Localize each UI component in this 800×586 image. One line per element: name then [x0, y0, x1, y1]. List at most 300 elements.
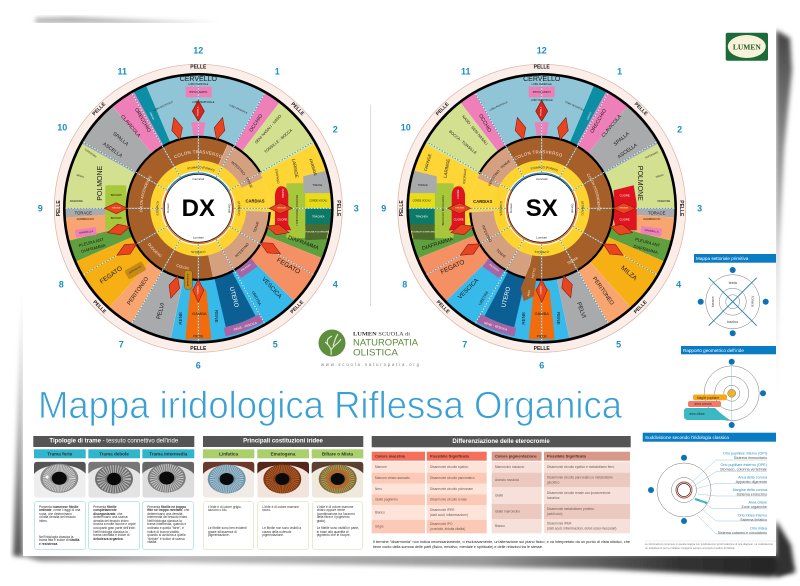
organ labels: PERITONEO — [126, 276, 151, 306]
clock numbers: 11 — [461, 66, 470, 76]
organ labels — [70, 76, 330, 338]
colon and stomach labels: INTESTINO — [232, 161, 246, 175]
column headers — [34, 449, 194, 458]
organ labels: ORECCHIO — [589, 108, 608, 134]
legend labels: Orlo pupillare interno (OPI) — [723, 452, 767, 456]
outer skin ring: PELLE — [534, 65, 550, 71]
legend labels: Orlo iridea — [750, 526, 768, 530]
outer skin ring: PELLE — [435, 299, 451, 316]
reflex diamonds: TIROIDE — [112, 207, 121, 209]
clock numbers: 3 — [354, 203, 359, 213]
organ labels: BRONCHI — [111, 194, 122, 197]
table: colore pigmentazione: Arancio rossiccio — [495, 478, 519, 482]
organ labels: FARINGE — [423, 153, 432, 171]
organ labels: OCCHIO — [248, 113, 264, 133]
clock numbers: 6 — [196, 360, 201, 370]
clock numbers: 6 — [539, 360, 544, 370]
outer skin ring: PELLE — [633, 101, 649, 118]
organ labels: RENE - VESCICA — [233, 321, 257, 332]
organ labels: SUPERIORE — [84, 148, 97, 159]
organ labels: IPPOCAMPO — [533, 90, 551, 94]
note: tiene conto della somma delle parti (fisico, emotivo, mentale e spirituale) e delle relazioni tra le stesse. — [373, 545, 543, 549]
organ labels: POLMONE — [636, 166, 643, 201]
table: colore pigmentazione: Bianco — [495, 524, 505, 528]
organ labels: CORDE VOCALI — [413, 199, 431, 202]
organ labels: BRONCHI / BRONCHIOLI — [295, 195, 299, 226]
disclaimer — [645, 541, 776, 550]
table: colore macchia: Disarmonie circuito pancreatico — [430, 476, 475, 480]
table: colore macchia — [372, 452, 487, 533]
column headers — [203, 449, 363, 458]
reflex diamonds: TIROIDE — [455, 207, 465, 209]
diagram: area corona — [694, 402, 712, 406]
title: Mappa iridologica Riflessa Organica — [38, 385, 623, 427]
dashed hour spokes — [409, 75, 675, 341]
outer skin ring: PELLE — [289, 299, 306, 315]
organ labels: PELVI — [575, 301, 586, 319]
disclaimer: Le informazioni contenute in questa mappa non sostituiscono la formulazione di una diagnosi, né costituiscono — [645, 543, 774, 546]
text box: trama debole: Presenta fibrille completamente disorganizzate, che determinano una scarsa densità del tessuto irideo dovuta a molte lacune e cripte occupanti gran parte dell'iride. Nell'iridologia classica la trama rarefatta è indice di debolezza organica. — [93, 504, 136, 541]
legend labels: Orlo iridea interno — [738, 514, 767, 518]
disclaimer: un trattamento per le malattie: rivolgersi sempre al proprio medico di fiducia. — [645, 547, 735, 550]
organ labels: TONSILLE - BOCCA — [264, 128, 293, 154]
organ labels: CUORE — [456, 189, 460, 199]
table: colore pigmentazione: (acidi urici) — [547, 512, 562, 516]
table: colore macchia: Marrone — [375, 465, 387, 469]
legend labels: Margine della corona — [733, 488, 768, 492]
text box: biliare o mista: L'iride è di colore marrone chiaro oppure verde (combinazione tra l'azzurro della fibra e il pigmento giallo). — [317, 504, 355, 523]
organ labels: CORDE VOCALI — [309, 199, 328, 202]
organ labels: BOCCA - TONSILLE — [448, 130, 478, 155]
table: colore pigmentazione: Disarmonie circuito epatico e metabolismo ferro — [547, 465, 615, 469]
clock numbers: 3 — [697, 203, 702, 213]
organ labels: PROSTATA — [241, 263, 252, 272]
organ labels: VESCICA — [457, 278, 480, 301]
logo: Lumen scuola di naturopatia olistica — [318, 330, 420, 367]
organ labels: ASCELLA — [617, 142, 639, 160]
diagram — [684, 359, 766, 428]
vertebral labels and SX: Dorsali — [509, 203, 513, 213]
reflex diamonds: PINEALE — [540, 106, 543, 116]
heading: Principali costituzioni iridee — [243, 439, 324, 445]
column headers: Trama intermedia — [149, 452, 188, 456]
organ labels: PLEURA POSTERIORE — [411, 230, 435, 233]
sub blocks: respiratory and heart — [409, 87, 662, 339]
colon and stomach labels: TENUE — [500, 160, 510, 168]
table: colore pigmentazione: tossinica — [547, 496, 560, 500]
table: colore macchia: Disarmonie circuito epatico — [430, 465, 468, 469]
panel: rapporto geometrico dell'iride — [681, 346, 776, 428]
diagram: area ciliare — [689, 412, 705, 416]
organ labels: UTERO — [228, 286, 239, 309]
organ labels: FEGATO — [99, 265, 124, 286]
colon and stomach labels: TENUE — [496, 248, 506, 258]
reflex diamonds — [104, 100, 292, 302]
organ labels: FEGATO — [440, 259, 466, 276]
organ labels: LOBO TEMPORALE — [531, 99, 553, 102]
organ labels: ESOFAGO — [462, 168, 467, 184]
stomach ring and pupil — [150, 160, 246, 256]
vertebral labels and SX: Dorsali — [571, 204, 575, 213]
legend labels: Sistema linfatico — [740, 518, 767, 522]
organ labels: MAMMELLA — [645, 229, 659, 234]
colon and stomach labels: COLON DISCENDENTE — [587, 174, 600, 212]
organ labels: DIAFRAMMA — [81, 243, 106, 254]
wheel: DX right eye map — [38, 45, 359, 370]
colon and stomach labels: INTESTINO — [482, 225, 492, 242]
vertebral labels and DX: Lombari — [193, 235, 204, 239]
organ labels: RENE — [214, 310, 219, 323]
column headers: Trama forte — [47, 452, 73, 456]
organ labels: LOBO PARIETALE — [532, 83, 552, 86]
organ labels: CISTIFELLEA — [128, 265, 142, 275]
colon and stomach labels — [473, 150, 600, 264]
organ labels: AVAMBRACCIO — [643, 218, 660, 221]
table: colore macchia: Disarmonie IPER — [430, 508, 455, 512]
clock numbers: 12 — [537, 45, 547, 55]
organ labels: PELVI — [156, 302, 166, 320]
vertebral labels and DX: Cervicali — [193, 177, 204, 181]
text box: biliare o mista: Le fibrille sono visibili in parte, in base alla quantità di pigmento che le ricopre. — [317, 526, 359, 537]
table: colore macchia: Bianco — [375, 510, 385, 514]
clock numbers — [38, 45, 359, 370]
heading — [33, 436, 194, 447]
organ labels: RENE — [521, 312, 526, 325]
eye photo: ematogena — [257, 462, 309, 498]
clock numbers: 9 — [381, 203, 386, 213]
vertebral labels and DX — [166, 177, 231, 239]
reflex diamonds: APPENDICE — [186, 273, 189, 286]
eye photo: trama debole — [88, 462, 140, 498]
organ labels: SUPERIORE — [645, 151, 659, 160]
colon and stomach labels: STOMACO (FONDO) — [530, 166, 558, 172]
clock numbers: 8 — [402, 279, 407, 289]
diagram — [648, 455, 767, 534]
organ labels: ESOFAGO — [274, 169, 280, 185]
organ labels: CUORE — [620, 217, 630, 221]
organ labels: LOBO OCCIPITALE — [564, 100, 585, 112]
logo: Edizioni Lumen — [726, 33, 768, 61]
table: colore pigmentazione: Disarmonie circuito pancreatico e metabolismo — [547, 476, 613, 480]
clock numbers: 1 — [617, 66, 622, 76]
logo: Lumen scuola di naturopatia olistica: NATUROPATIA — [353, 338, 419, 348]
organ labels: INFERIORE — [70, 200, 83, 203]
outer skin ring: PELLE — [335, 200, 341, 217]
table: colore pigmentazione: Disarmonie IPER — [547, 522, 572, 526]
table: colore macchia: Possibile Significato — [430, 454, 470, 459]
vertebral labels and SX: SX — [526, 195, 558, 222]
legend labels: Sistema endocrino — [736, 492, 767, 496]
text box: trama intermedia: Presenta fibrille né troppo fitte né troppo rarefatte, che determinano una densità intermedia del tessuto irideo. Nell'iridologia classica la trama intermedia, quando è ordinata e quella "forte", è indice di buona vitalità, quando si avvicina a quella "debole" è indice di scarsa vitalità. — [147, 504, 189, 544]
organ labels: PLEURA ANT — [635, 237, 661, 248]
column headers: Ematogena — [271, 452, 296, 456]
reflex diamonds: TIROIDE — [277, 207, 286, 209]
table: colore pigmentazione: Giallo — [495, 494, 503, 498]
outer skin ring: PELLE — [56, 200, 62, 216]
diagram: Maglie pupillare — [697, 396, 719, 400]
colon and stomach labels: STOMACO — [156, 201, 159, 216]
text box: ematogena — [257, 501, 309, 550]
colon and stomach labels: STOMACO — [500, 201, 502, 216]
organ labels: SPALLA — [111, 131, 130, 148]
heading: Tipologie di trame - tessuto connettivo dell'iride — [49, 439, 179, 445]
diagram: bacino — [727, 320, 738, 324]
colon and stomach labels: CARDIAS — [245, 199, 265, 204]
column headers: Trama debole — [99, 452, 129, 456]
table: colore pigmentazione: Disarmonie metabolismo proteico — [547, 507, 595, 511]
note: Il termine "disarmonia" non indica necessariamente, o esclusivamente, un'alterazione sul piano fisico, e va interpretato da un punto di vista olistico, che — [373, 540, 630, 544]
clock numbers: 4 — [676, 279, 681, 289]
text box: biliare o mista — [312, 501, 363, 550]
organ labels: MEDIO — [76, 174, 85, 179]
table: colore pigmentazione — [492, 452, 630, 533]
table: colore macchia: Disarmonie IPO — [430, 522, 453, 526]
sub blocks: respiratory and heart — [75, 87, 331, 339]
organ labels: TRACHEA — [312, 214, 325, 218]
outer skin ring: PELLE — [91, 101, 108, 117]
legend labels: Area ciliare — [749, 500, 767, 504]
legend labels: Sistema cutaneo e circolatorio — [718, 531, 767, 535]
organ labels: PERITONEO — [591, 276, 615, 307]
reflex diamonds: GAMBA — [196, 286, 199, 294]
column headers: Linfatica — [219, 452, 238, 456]
vertebral labels and SX: Lombari — [536, 235, 547, 239]
organ labels: ASCELLA — [101, 141, 124, 160]
legend labels: Zone organiche — [741, 505, 767, 509]
outer skin ring: PELLE — [435, 101, 451, 117]
organ labels: SPALLA — [613, 131, 631, 148]
outer skin ring: PELLE — [633, 299, 649, 315]
clock numbers: 8 — [59, 279, 64, 289]
clock numbers: 4 — [333, 279, 338, 289]
panel: mappa settoriale primitiva — [694, 254, 776, 336]
heading: Differenziazione delle eterocromie — [452, 439, 550, 445]
note — [373, 540, 630, 549]
heading: Suddivisione secondo l'iridologia classica — [645, 435, 729, 440]
organ labels: LOBO PARIETALE — [188, 83, 209, 86]
legend labels: Sistema immunitario — [734, 456, 767, 460]
colon and stomach labels: COLON ASCENDENTE — [140, 176, 152, 212]
colon and stomach labels: COLON — [176, 264, 189, 270]
panel: suddivisione secondo l'iridologia classica — [643, 433, 776, 550]
vertebral labels and SX: Cervicali — [536, 177, 548, 181]
outer skin ring: PELLE — [534, 346, 550, 352]
organ labels: CUORE — [620, 193, 630, 197]
organ labels: MILZA — [619, 265, 639, 283]
organ wedges — [392, 58, 692, 358]
clock numbers: 7 — [119, 339, 124, 349]
retto strip: ANO — [526, 289, 531, 297]
organ labels: POLMONE — [97, 165, 104, 201]
icon: tree — [318, 330, 346, 356]
colon and stomach labels: DUODENO — [148, 242, 162, 257]
organ labels: DIAFRAMMA — [287, 235, 320, 252]
divider between wheels — [370, 105, 372, 306]
wheel: SX left eye map — [381, 45, 702, 370]
organ labels: TORACE — [418, 184, 428, 187]
organ labels: OCCHIO — [477, 113, 492, 134]
black iris borders — [408, 74, 676, 342]
text box: linfatica: L'iride è di colore grigio, azzurro o blu. — [208, 504, 242, 512]
logo: Edizioni Lumen: LUMEN — [733, 42, 761, 52]
organ labels: FEGATO — [275, 257, 301, 276]
colon and stomach labels: STOMACO — [581, 201, 584, 216]
organ labels: LARINGE — [443, 158, 451, 178]
table: colore macchia: Disarmonie circuito polmonare — [430, 487, 473, 491]
colon and stomach labels: STOMACO — [534, 250, 549, 254]
legend labels: Stomaco, colonna vertebrale — [720, 468, 767, 472]
eye photo: trama intermedia — [142, 462, 194, 498]
text box: ematogena: L'iride è di colore marrone scuro. — [262, 504, 299, 512]
retto strip — [521, 256, 540, 301]
colon and stomach labels: STOMACO — [191, 250, 206, 254]
organ labels: PLEURA ANT — [78, 236, 105, 248]
table: colore pigmentazione: Marroncino rossiccio — [495, 465, 524, 469]
organ labels: INFERIORE — [657, 200, 671, 203]
organ labels: PIEDE — [193, 334, 204, 338]
organ labels: CUORE — [454, 217, 464, 221]
organ wedges — [25, 35, 371, 381]
organ labels: AVAMBRACCIO — [77, 218, 94, 221]
vertebral labels and DX: Dorsali — [227, 204, 231, 213]
table: colore pigmentazione: glucidico — [547, 480, 560, 484]
organ labels: LOBO FRONTALE — [489, 101, 509, 112]
dashed hour spokes — [65, 75, 331, 341]
organ labels: FARINGE — [308, 158, 318, 177]
vertebral labels and DX: DX — [182, 195, 215, 222]
outer skin ring: PELLE — [190, 65, 207, 71]
reflex diamonds: GAMBA — [540, 286, 543, 294]
organ labels: LINGUA — [586, 111, 593, 120]
logo: Lumen scuola di naturopatia olistica: OLISTICA — [353, 348, 399, 358]
heading — [372, 436, 631, 447]
diagram: torace — [711, 296, 715, 307]
organ labels: NASO - SENI NASALI — [461, 115, 488, 146]
table: colore macchia: (cronicità, iridotta vitalità) — [430, 527, 465, 531]
outer skin ring: PELLE — [289, 101, 306, 118]
table: colore macchia: (stati acuti, infiammazione) — [430, 513, 468, 517]
colon and stomach labels: INTESTINO — [235, 243, 248, 258]
diagram: torace — [750, 296, 754, 307]
clock numbers: 12 — [193, 45, 203, 55]
organ labels: LOBO FRONTALE — [229, 104, 248, 115]
organ labels: URETRA — [251, 290, 262, 307]
organ labels: TORACE — [312, 184, 323, 187]
panel: principali costituzioni iridee — [203, 436, 364, 498]
text box: linfatica: Le fibrille sono ben evidenti grazie all'assenza di pigmentazione. — [208, 526, 247, 537]
colon and stomach labels: COLON TRASVERSO — [174, 150, 222, 158]
colon and stomach labels: TENUE — [253, 222, 259, 232]
vertebral labels and SX — [509, 177, 575, 239]
organ labels: VESCICA — [260, 277, 282, 300]
text box: trama debole — [88, 501, 140, 550]
organ labels: PIEDE — [537, 334, 548, 338]
reflex diamonds — [448, 100, 636, 302]
colon and stomach labels: STOMACO (FONDO) — [187, 166, 214, 172]
organ labels: RENE — [556, 312, 561, 325]
organ labels: BRONCHI / BRONCHIOLI — [441, 195, 445, 225]
eye photo: biliare o mista — [311, 462, 364, 498]
panel: tipologie di trame — [33, 436, 194, 498]
heading — [203, 436, 363, 447]
organ labels: MAMMELLA — [79, 230, 94, 235]
table: colore macchia: Giallo paglierino — [375, 498, 398, 502]
organ labels: IPPOCAMPO — [189, 90, 208, 94]
logo: Lumen scuola di naturopatia olistica: LUMEN SCUOLA di — [353, 332, 411, 338]
table: colore macchia: Nero — [375, 487, 382, 491]
organ labels: CERVELLO — [523, 76, 561, 83]
table: colore pigmentazione: Possibile Significato — [547, 454, 587, 459]
organ labels: TORACE — [648, 210, 666, 215]
table: colore macchia: Disarmonie circuito renale — [430, 498, 467, 502]
organ labels: RENE — [178, 312, 183, 325]
organ labels: GAMBA — [192, 311, 207, 316]
black iris borders — [64, 74, 332, 342]
organ labels: ORECCHIO — [133, 107, 152, 134]
organ labels: CUORE — [277, 217, 287, 221]
table: colore pigmentazione: Colore pigmentazione — [495, 454, 538, 459]
organ labels: URETRA — [478, 290, 490, 306]
outer skin ring — [398, 64, 686, 352]
logo: Edizioni Lumen: EDIZIONI — [740, 35, 753, 39]
organ labels: CLAVICOLA — [600, 113, 623, 139]
legend labels: Area della corona — [738, 476, 768, 480]
organ labels: LOBO OCCIPITALE — [153, 100, 174, 112]
clock numbers: 1 — [275, 66, 280, 76]
heading: Mappa settoriale primitiva — [696, 256, 749, 261]
organ labels: TORACE — [75, 210, 92, 215]
reflex diamonds: TIROIDE — [619, 207, 629, 209]
outer skin ring: PELLE — [399, 200, 405, 216]
table: colore pigmentazione: Giallo marroncino — [495, 510, 520, 514]
clock numbers: 5 — [273, 339, 278, 349]
organ labels: LOBO TEMPORALE — [192, 101, 215, 104]
eye photo: linfatica — [203, 462, 255, 498]
text box: trama forte — [34, 501, 86, 550]
colon and stomach labels: TENUE — [246, 176, 252, 188]
organ labels: MEDIO — [656, 174, 664, 179]
colon and stomach labels: CARDIAS — [473, 199, 492, 204]
colon and stomach labels: INTESTINO — [488, 170, 500, 186]
retto strip: RETTO — [531, 267, 537, 279]
text box: linfatica — [203, 501, 254, 550]
vertebral labels and DX: Dorsali — [166, 203, 170, 213]
organ labels: CLAVICOLA — [119, 114, 142, 139]
table: colore macchia: Marrone chiaro arancato — [375, 476, 410, 480]
clock numbers: 10 — [401, 122, 411, 132]
text box: trama forte: Nell'iridologia classica la trama fitta è indice di vitalità e resistenza. — [39, 534, 79, 546]
clock numbers: 2 — [333, 124, 338, 134]
organ labels: DIAFRAMMA — [421, 236, 454, 252]
text box: ematogena: Le fibrille non sono visibili a causa della notevole pigmentazione. — [262, 526, 301, 537]
organ labels — [411, 76, 671, 338]
clock numbers: 2 — [677, 124, 682, 134]
organ labels: PROSTATA — [488, 263, 500, 273]
reflex diamonds: PINEALE — [196, 106, 199, 116]
clock numbers — [381, 45, 702, 370]
organ labels: UTERO — [501, 286, 512, 308]
eye photo: trama forte — [34, 462, 86, 498]
organ labels: RENE - VESCICA — [484, 321, 508, 332]
table: colore pigmentazione: (stati acuti, infiammazioni, dolori ossei-muscolari) — [547, 526, 616, 530]
colon ring — [461, 128, 622, 289]
outer skin ring — [54, 64, 342, 352]
outer skin ring: PELLE — [678, 200, 684, 217]
colon and stomach labels — [140, 150, 265, 270]
panel: differenziazione delle eterocromie — [372, 436, 631, 549]
organ labels: SENI NASALI - NASO — [254, 114, 282, 145]
colon and stomach labels: SIGMA — [567, 257, 578, 264]
